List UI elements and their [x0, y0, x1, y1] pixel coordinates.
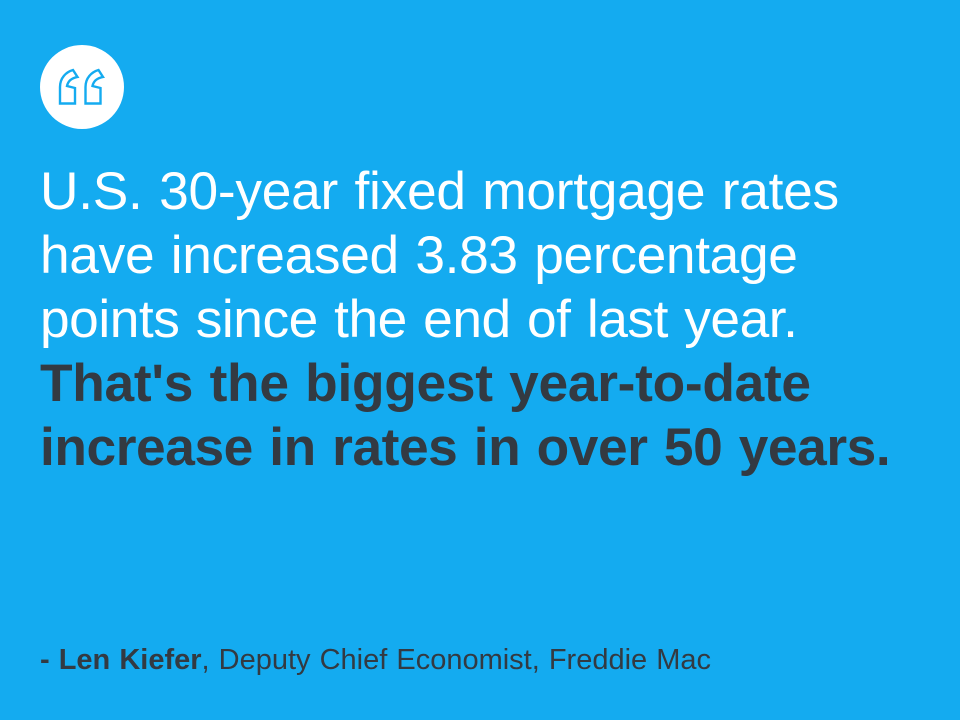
quote text: That's the biggest year-to-date [40, 354, 811, 413]
quote text: U.S. 30-year fixed mortgage rates [40, 162, 839, 221]
quote text: have increased 3.83 percentage [40, 226, 798, 285]
quote text: points since the end of last year. [40, 290, 797, 349]
quote text [40, 162, 890, 477]
icon: quotation mark badge [40, 45, 124, 129]
quote text: increase in rates in over 50 years. [40, 418, 890, 477]
attribution: - Len Kiefer, Deputy Chief Economist, Freddie Mac [40, 644, 711, 676]
